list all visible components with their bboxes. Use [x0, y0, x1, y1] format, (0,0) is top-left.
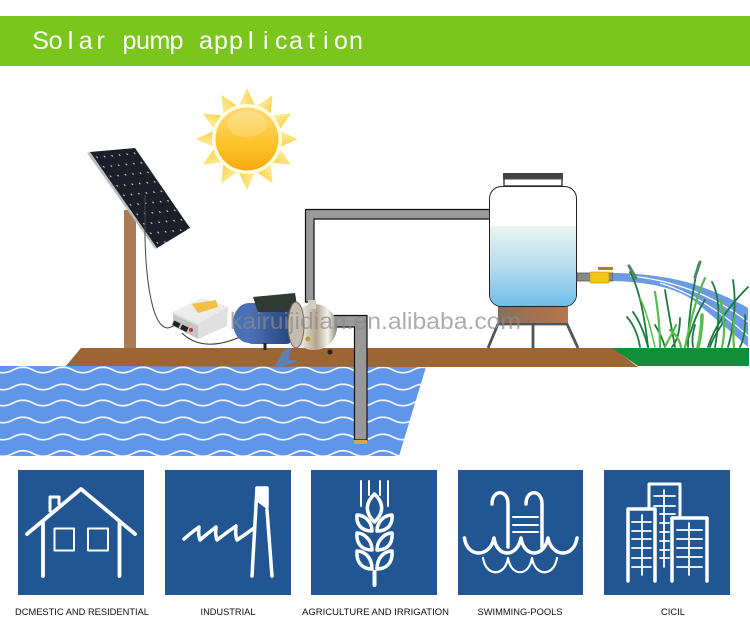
water reservoir	[0, 366, 453, 456]
sun	[196, 88, 298, 190]
tank base	[498, 306, 568, 323]
pump	[233, 293, 337, 367]
icon: factory	[184, 488, 272, 576]
pipe: vertical riser and top run	[306, 210, 490, 302]
panel: agriculture and irrigation	[302, 470, 449, 617]
label: INDUSTRIAL	[200, 607, 256, 617]
icon: city buildings	[628, 484, 707, 581]
title: Solar pump application	[32, 27, 363, 55]
icon: pool ladder	[464, 493, 577, 572]
tank	[488, 173, 578, 348]
tank lid	[503, 173, 563, 186]
faucet	[577, 267, 613, 283]
cable: controller to pump	[182, 333, 240, 344]
label: DCMESTIC AND RESIDENTIAL	[15, 607, 149, 617]
grass plants	[627, 262, 748, 347]
solar panel post	[124, 210, 136, 348]
panel: domestic and residential	[15, 470, 149, 617]
icon: house	[27, 489, 135, 576]
panel: industrial	[165, 470, 291, 617]
panel: swimming pools	[458, 470, 583, 617]
label: CICIL	[661, 607, 685, 617]
tank water	[490, 226, 576, 306]
water jet	[613, 273, 748, 347]
panel: civil	[604, 470, 730, 617]
cable: panel to controller	[145, 195, 174, 328]
solar panel	[87, 148, 190, 249]
label: SWIMMING-POOLS	[478, 607, 562, 617]
pipe: suction drop into water	[330, 316, 367, 444]
header banner	[0, 16, 750, 66]
label: AGRICULTURE AND IRRIGATION	[302, 607, 449, 617]
tank stand legs	[488, 324, 578, 348]
controller box	[172, 298, 228, 339]
tank body	[490, 186, 576, 306]
ground	[65, 348, 638, 367]
watermark: kairuijidian.en.alibaba.com	[230, 308, 521, 334]
grass ground	[612, 348, 749, 366]
icon: wheat	[357, 481, 392, 585]
